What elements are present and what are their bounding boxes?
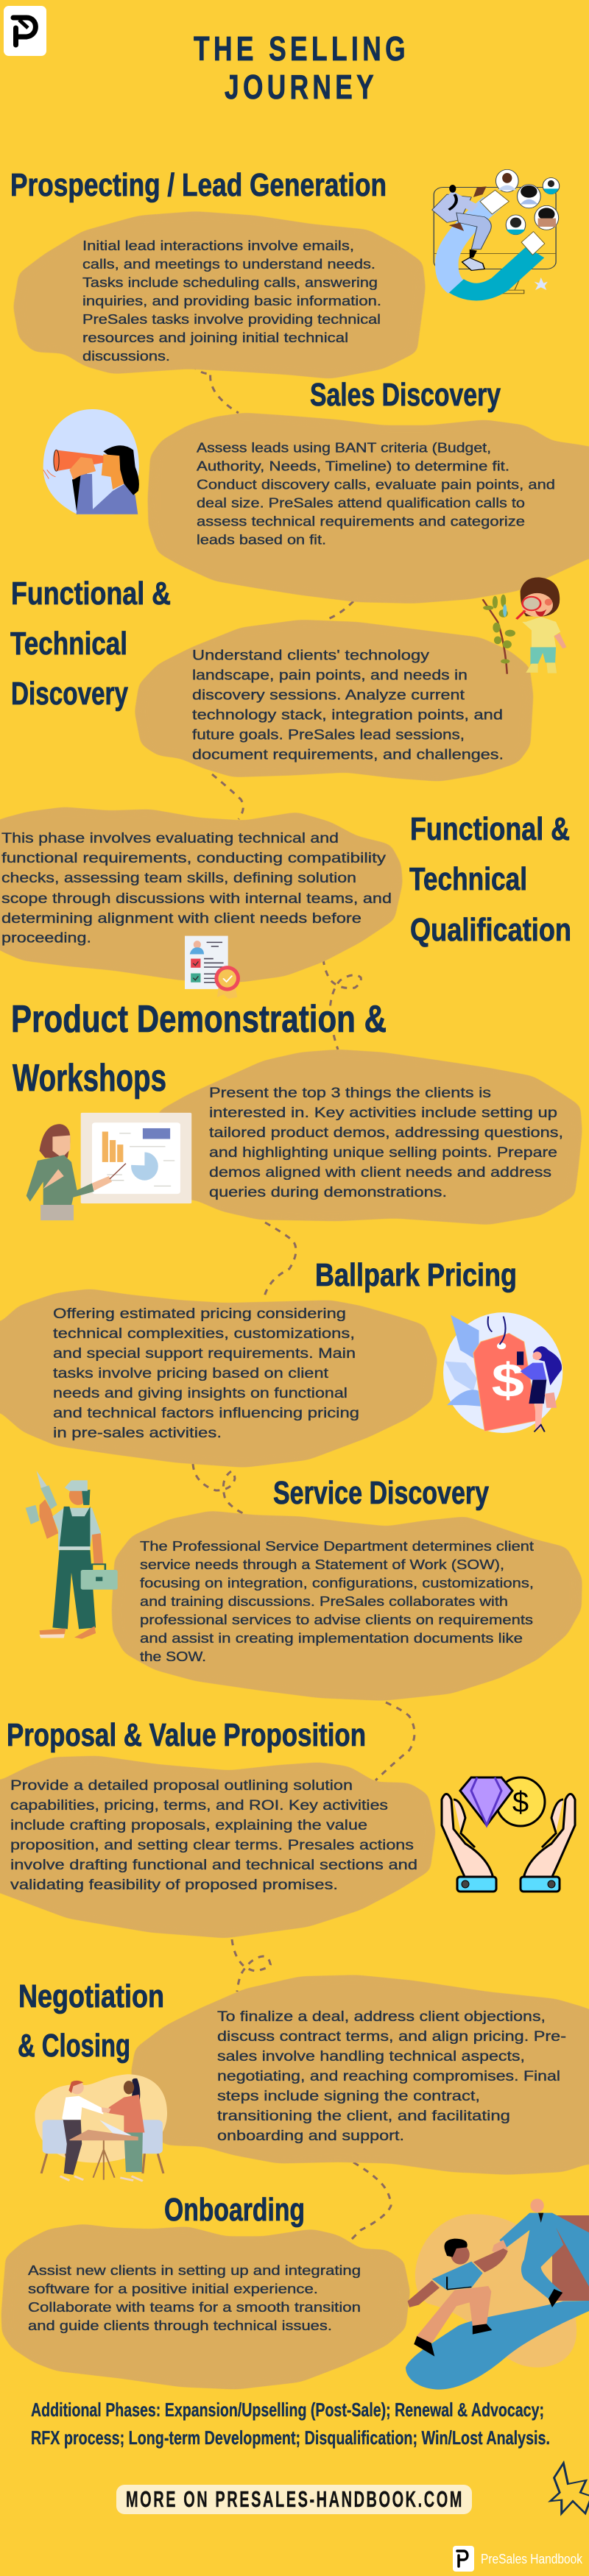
connector 1 — [191, 365, 239, 413]
blob: functional and technical discovery — [135, 620, 533, 782]
connector 5 — [264, 1222, 296, 1297]
text: product demonstration: Present the top 3 things the clients is — [209, 1085, 491, 1101]
text: onboarding: Collaborate with teams for a smooth transition — [28, 2300, 361, 2315]
heading: product demonstration: Product Demonstration & — [11, 998, 387, 1041]
heading: product demonstration: Workshops — [13, 1057, 166, 1100]
text: ballpark pricing: and special support requirements. Main — [53, 1345, 356, 1362]
text: functional and technical discovery: discovery sessions. Analyze current — [192, 687, 465, 704]
heading: proposal and value proposition: Proposal & Value Proposition — [7, 1717, 366, 1753]
text: functional and technical qualification — [1, 830, 392, 946]
icon: girl with magnifier — [483, 577, 566, 674]
text: onboarding: software for a positive initial experience. — [28, 2282, 318, 2296]
heading: negotiation and closing: Negotiation — [18, 1978, 164, 2014]
text: ballpark pricing: needs and giving insights on functional — [53, 1385, 348, 1401]
text: prospecting: resources and joining initial technical — [82, 330, 348, 345]
text: proposal and value proposition: include crafting proposals, explaining the value — [10, 1817, 367, 1833]
panel: service discovery — [26, 1471, 582, 1701]
text: prospecting: PreSales tasks involve providing technical — [82, 312, 381, 327]
text: service discovery: service needs through a Statement of Work (SOW), — [140, 1557, 504, 1572]
text: sales discovery: Conduct discovery calls, evaluate pain points, and — [197, 477, 555, 492]
icon: hands with diamond and coin: $ — [512, 1786, 529, 1819]
text: prospecting: calls, and meetings to understand needs. — [82, 257, 375, 272]
text: service discovery: and training discussions. PreSales collaborates with — [140, 1594, 508, 1609]
text: prospecting: discussions. — [82, 349, 170, 364]
text: functional and technical discovery: landscape, pain points, and needs in — [192, 667, 468, 683]
heading: onboarding: Onboarding — [164, 2192, 305, 2228]
footer brand — [453, 2546, 583, 2572]
text: prospecting — [82, 238, 381, 364]
text: negotiation and closing: transitioning the client, and facilitating — [217, 2108, 510, 2124]
text: functional and technical discovery: future goals. PreSales lead sessions, — [192, 727, 465, 743]
panel: product demonstration — [11, 998, 582, 1225]
blob: functional and technical qualification — [0, 807, 403, 983]
blob: product demonstration — [158, 1050, 582, 1225]
heading: negotiation and closing: & Closing — [18, 2028, 130, 2064]
text: sales discovery: assess technical requirements and categorize — [197, 514, 525, 528]
text: service discovery: professional services to advise clients on requirements — [140, 1613, 533, 1627]
text: service discovery: The Professional Service Department determines client — [140, 1539, 534, 1554]
text: sales discovery: Authority, Needs, Timeline) to determine fit. — [197, 459, 509, 474]
heading: prospecting: Prospecting / Lead Generation — [10, 167, 387, 203]
text: sales discovery — [197, 440, 555, 548]
panel: ballpark pricing — [0, 1257, 562, 1468]
icon: handshake at table — [35, 2074, 167, 2181]
text: product demonstration — [209, 1085, 563, 1200]
text: negotiation and closing — [217, 2009, 566, 2144]
heading: functional and technical qualification: Technical — [409, 861, 527, 897]
connector 2 — [326, 601, 353, 620]
text: functional and technical qualification: scope through discussions with internal teams, and — [1, 891, 392, 907]
text: service discovery — [140, 1539, 534, 1664]
panel: sales discovery — [43, 377, 589, 604]
title: THE SELLING — [194, 29, 409, 68]
text: proposal and value proposition: capabilities, pricing, terms, and ROI. Key activities — [10, 1797, 388, 1814]
text: negotiation and closing: onboarding and support. — [217, 2128, 404, 2144]
text: service discovery: and assist in creating implementation documents like — [140, 1631, 523, 1646]
heading: functional and technical qualification — [409, 811, 571, 948]
text: functional and technical qualification: determining alignment with client needs before — [1, 910, 361, 927]
icon: helping hand climb — [406, 2198, 589, 2390]
icon: price tag and shopper: $ — [492, 1354, 524, 1407]
panel: onboarding — [1, 2192, 589, 2390]
connector 6 — [193, 1464, 244, 1514]
icon: worker with drill and toolbox — [26, 1471, 118, 1639]
heading: functional and technical discovery: Technical — [10, 626, 127, 662]
text: service discovery: the SOW. — [140, 1649, 206, 1664]
heading: functional and technical discovery: Functional & — [11, 576, 171, 612]
text: sales discovery: Assess leads using BANT criteria (Budget, — [197, 440, 491, 455]
heading: service discovery: Service Discovery — [273, 1475, 489, 1511]
text: negotiation and closing: steps include signing the contract, — [217, 2088, 480, 2104]
text: prospecting: Initial lead interactions involve emails, — [82, 238, 354, 253]
text: negotiation and closing: negotiating, and reaching compromises. Final — [217, 2068, 560, 2084]
logo top left — [4, 6, 46, 56]
text: functional and technical discovery: document requirements, and challenges. — [192, 746, 504, 762]
text: functional and technical discovery: Understand clients' technology — [192, 648, 429, 664]
connector 9 — [348, 2162, 391, 2243]
text: sales discovery: leads based on fit. — [197, 533, 326, 548]
text: functional and technical qualification: proceeding. — [1, 930, 91, 946]
call to action pill — [116, 2485, 472, 2514]
text: ballpark pricing — [53, 1306, 359, 1441]
heading: sales discovery: Sales Discovery — [310, 377, 501, 413]
panel: functional and technical discovery — [10, 576, 566, 782]
text: onboarding — [28, 2263, 361, 2333]
blob: prospecting — [13, 211, 426, 379]
icon: hands with diamond and coin — [442, 1777, 575, 1892]
text: ballpark pricing: and technical factors influencing pricing — [53, 1405, 359, 1421]
connector 3 — [212, 774, 243, 819]
heading: functional and technical discovery: Discovery — [11, 676, 128, 712]
text: service discovery: focusing on integration, configurations, customizations, — [140, 1576, 534, 1590]
additional phases note — [31, 2399, 550, 2449]
text: proposal and value proposition — [10, 1777, 417, 1893]
text: product demonstration: tailored product demos, addressing questions, — [209, 1125, 563, 1141]
panel: proposal and value proposition — [0, 1717, 575, 1938]
icon: star burst — [550, 2463, 589, 2513]
icon: presenter with chart board — [27, 1113, 191, 1220]
blob: ballpark pricing — [0, 1289, 437, 1468]
text: functional and technical qualification: This phase involves evaluating technical and — [1, 830, 339, 846]
panel: functional and technical qualification — [0, 807, 571, 999]
text: sales discovery: deal size. PreSales attend qualification calls to — [197, 496, 525, 511]
text: ballpark pricing: tasks involve pricing based on client — [53, 1365, 329, 1381]
icon: certificate — [185, 936, 240, 999]
text: functional and technical qualification: checks, assessing team skills, defining solution — [1, 870, 356, 886]
text: proposal and value proposition: Provide a detailed proposal outlining solution — [10, 1777, 353, 1794]
text: negotiation and closing: To finalize a deal, address client objections, — [217, 2009, 546, 2025]
text: prospecting: Tasks include scheduling calls, answering — [82, 275, 378, 290]
text: proposal and value proposition: validating feasibility of proposed promises. — [10, 1877, 338, 1893]
blob: onboarding — [1, 2224, 410, 2390]
text: ballpark pricing: in pre-sales activities. — [53, 1425, 222, 1441]
icon: magnet and person — [432, 169, 560, 294]
text: functional and technical discovery: technology stack, integration points, and — [192, 707, 503, 723]
heading: negotiation and closing — [18, 1978, 164, 2064]
text: functional and technical qualification: functional requirements, conducting compatibility — [1, 850, 386, 866]
text: product demonstration: queries during demonstrations. — [209, 1184, 447, 1200]
icon: woman with megaphone — [43, 409, 139, 514]
heading: functional and technical discovery — [10, 576, 171, 712]
text: functional and technical discovery — [192, 648, 504, 762]
text: onboarding: and guide clients through technical issues. — [28, 2318, 332, 2333]
blob: service discovery — [112, 1511, 582, 1701]
heading: ballpark pricing: Ballpark Pricing — [315, 1257, 517, 1293]
text: product demonstration: interested in. Key activities include setting up — [209, 1105, 557, 1121]
text: ballpark pricing: Offering estimated pricing considering — [53, 1306, 346, 1322]
icon: price tag and shopper — [443, 1312, 562, 1433]
title: JOURNEY — [225, 68, 378, 106]
blob: proposal and value proposition — [0, 1755, 436, 1938]
text: ballpark pricing: technical complexities, customizations, — [53, 1326, 355, 1342]
text: product demonstration: demos aligned with client needs and address — [209, 1164, 551, 1181]
connector 8 — [232, 1939, 270, 1992]
text: onboarding: Assist new clients in setting up and integrating — [28, 2263, 361, 2278]
blob: negotiation and closing — [131, 1975, 589, 2175]
text: proposal and value proposition: proposition, and setting clear terms. Presales actions — [10, 1837, 414, 1853]
heading: product demonstration — [11, 998, 387, 1100]
panel: negotiation and closing — [18, 1975, 589, 2181]
text: negotiation and closing: discuss contract terms, and align pricing. Pre- — [217, 2028, 566, 2045]
title — [194, 29, 409, 106]
blob: sales discovery — [148, 413, 589, 604]
panel: prospecting — [10, 167, 560, 379]
text: product demonstration: and highlighting unique selling points. Prepare — [209, 1144, 557, 1161]
connector 4 — [323, 959, 361, 1050]
connector 7 — [375, 1702, 415, 1780]
text: proposal and value proposition: involve drafting functional and technical sections and — [10, 1857, 417, 1873]
text: prospecting: inquiries, and providing basic information. — [82, 294, 381, 308]
text: negotiation and closing: sales involve handling technical aspects, — [217, 2048, 525, 2064]
